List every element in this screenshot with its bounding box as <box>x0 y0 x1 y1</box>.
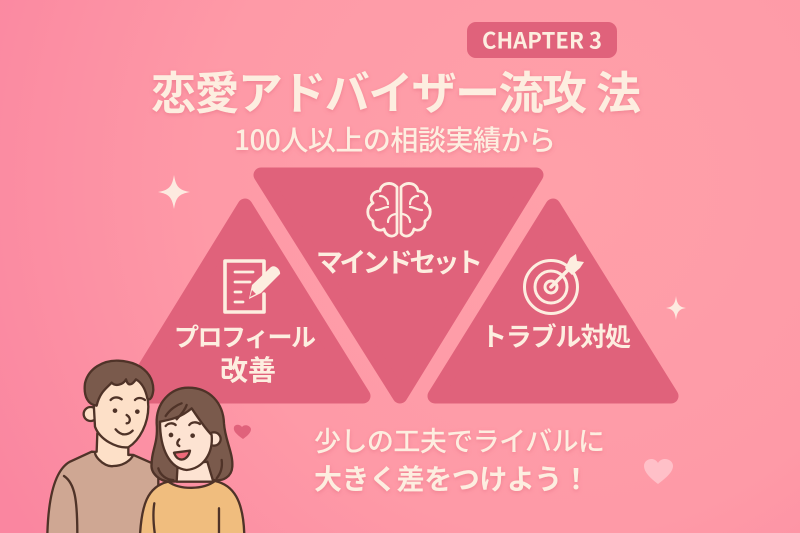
man <box>47 361 158 533</box>
label: profile improvement: プロフィール <box>174 318 316 354</box>
icon: small sparkle <box>666 296 686 320</box>
icon: brain <box>368 184 430 236</box>
icon: small heart <box>234 425 251 439</box>
icon: pale heart <box>644 459 673 484</box>
closing message <box>314 420 605 498</box>
panel: trouble handling triangle <box>435 206 671 396</box>
icon: large sparkle <box>158 175 190 209</box>
chapter badge: CHAPTER 3 <box>482 24 602 56</box>
closing message: 大きく差をつけよう！ <box>314 458 590 498</box>
title: 法 <box>596 57 641 122</box>
illustration: couple <box>47 361 244 533</box>
subtitle: 100人以上の相談実績から <box>234 119 556 159</box>
label: profile improvement <box>174 318 316 389</box>
title: 恋愛アドバイザー流攻 <box>151 57 587 122</box>
closing message: 少しの工夫でライバルに <box>314 420 605 459</box>
label: trouble handling: トラブル対処 <box>481 317 631 354</box>
panel: profile triangle <box>128 206 363 396</box>
icon: document and pencil <box>225 261 280 312</box>
icon: target with arrow <box>524 254 584 314</box>
panel: mindset inverted triangle <box>261 175 536 396</box>
label: mindset: マインドセット <box>316 241 483 280</box>
woman <box>140 388 244 533</box>
label: profile improvement: 改善 <box>220 349 276 389</box>
